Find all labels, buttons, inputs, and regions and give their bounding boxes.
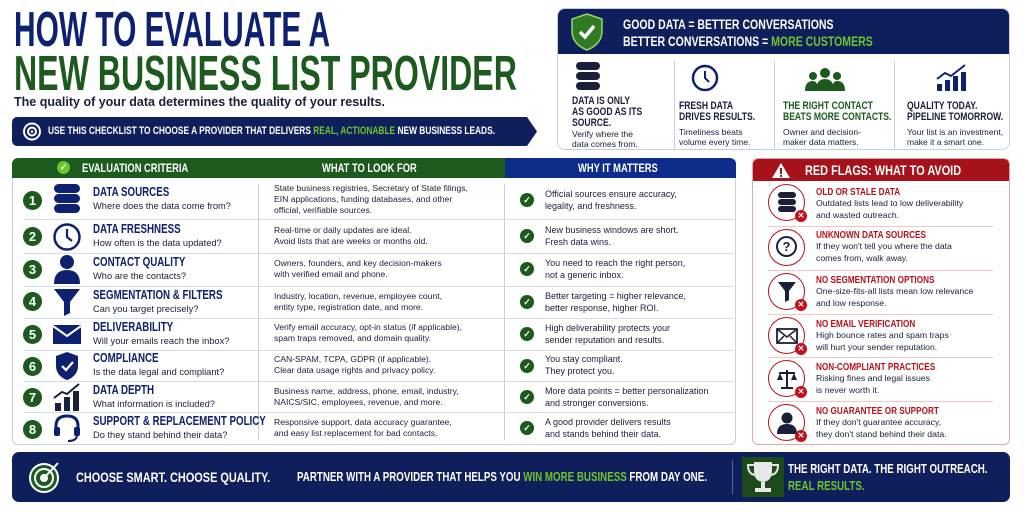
row 2: freshness: Real-time or daily updates are ideal. bbox=[274, 225, 412, 235]
title bbox=[14, 3, 517, 101]
row 8: support: Do they stand behind their data? bbox=[93, 430, 227, 440]
column: quality: make it a smart one. bbox=[907, 137, 984, 147]
row 1: data sources bbox=[23, 183, 677, 215]
flag 5: ✕ bbox=[798, 387, 804, 396]
row 1: data sources: State business registries, Secretary of State filings, bbox=[274, 183, 468, 193]
column: fresh: Timeliness beats bbox=[679, 127, 742, 137]
row 1: data sources: EIN applications, funding databases, and other bbox=[274, 194, 452, 204]
footer banner bbox=[12, 452, 1010, 502]
column: contact: Owner and decision- bbox=[783, 127, 861, 137]
column: quality: QUALITY TODAY. bbox=[907, 100, 977, 112]
row 1: data sources: Official sources ensure accuracy, bbox=[545, 189, 677, 199]
row 3: contact quality: ✓ bbox=[523, 264, 531, 274]
row 4: segmentation: Better targeting = higher relevance, bbox=[545, 291, 686, 301]
flag 6: NO GUARANTEE OR SUPPORT bbox=[816, 405, 939, 417]
row 8: support: 8 bbox=[29, 422, 36, 437]
table header bbox=[12, 158, 736, 178]
row 4: segmentation: Can you target precisely? bbox=[93, 304, 198, 314]
row 7: data depth: ✓ bbox=[523, 392, 531, 402]
row 4: segmentation: Industry, location, revenue, employee count, bbox=[274, 291, 442, 301]
flag 4 bbox=[768, 317, 949, 355]
row 7: data depth: More data points = better personalization bbox=[545, 386, 708, 396]
flag 3 bbox=[768, 273, 973, 311]
red header: RED FLAGS: WHAT TO AVOID bbox=[805, 162, 961, 178]
flag 5: NON-COMPLIANT PRACTICES bbox=[816, 361, 935, 373]
row 6: compliance: ✓ bbox=[523, 361, 531, 371]
row 8: support bbox=[23, 414, 671, 442]
row 5: deliverability: Will your emails reach the inbox? bbox=[93, 336, 229, 346]
flag 1 bbox=[768, 184, 964, 222]
column: contact: THE RIGHT CONTACT bbox=[783, 100, 873, 112]
row 8: support: and stands behind their data. bbox=[545, 429, 661, 439]
row 2: freshness: Fresh data wins. bbox=[545, 237, 611, 247]
table header: ✓ bbox=[60, 162, 67, 172]
row 4: segmentation: SEGMENTATION & FILTERS bbox=[93, 288, 222, 302]
column: fresh: DRIVES RESULTS. bbox=[679, 111, 755, 123]
flag 3: One-size-fits-all lists mean low relevance bbox=[816, 286, 973, 296]
flag 3: ✕ bbox=[798, 300, 804, 309]
row 8: support: SUPPORT & REPLACEMENT POLICY bbox=[93, 414, 266, 428]
row 7: data depth: NAICS/SIC, employees, revenue, and more. bbox=[274, 397, 443, 407]
flag 6: If they don't guarantee accuracy, bbox=[816, 417, 941, 427]
row 1: data sources: Where does the data come from? bbox=[93, 201, 231, 211]
flag 4: High bounce rates and spam traps bbox=[816, 330, 949, 340]
flag 2: comes from, walk away. bbox=[816, 252, 908, 262]
row 3: contact quality: CONTACT QUALITY bbox=[93, 255, 185, 269]
column: source: AS GOOD AS ITS bbox=[572, 106, 642, 118]
row 3: contact quality: Owners, founders, and key decision-makers bbox=[274, 258, 442, 268]
row 6: compliance: 6 bbox=[29, 359, 36, 374]
row 8: support: ✓ bbox=[523, 423, 531, 433]
flag 1: OLD OR STALE DATA bbox=[816, 186, 900, 198]
column: quality: Your list is an investment, bbox=[907, 127, 1003, 137]
row 1: data sources: official, verifiable sources. bbox=[274, 205, 372, 215]
flag 4: will hurt your sender reputation. bbox=[816, 342, 937, 352]
row 2: freshness: 2 bbox=[29, 229, 36, 244]
flag 4: NO EMAIL VERIFICATION bbox=[816, 318, 915, 330]
row 2: freshness: How often is the data updated? bbox=[93, 238, 222, 248]
row 1: data sources: 1 bbox=[29, 193, 36, 208]
column: quality: PIPELINE TOMORROW. bbox=[907, 111, 1003, 123]
icon: target bbox=[29, 462, 59, 493]
column: source bbox=[572, 62, 642, 148]
title: HOW TO EVALUATE A bbox=[14, 3, 330, 57]
row 5: deliverability: 5 bbox=[29, 327, 36, 342]
row 3: contact quality: with verified email and phone. bbox=[274, 269, 388, 279]
column: fresh bbox=[674, 61, 769, 151]
row 1: data sources: DATA SOURCES bbox=[93, 185, 169, 199]
table header: WHAT TO LOOK FOR bbox=[322, 161, 417, 175]
row 2: freshness: ✓ bbox=[523, 231, 531, 241]
column: source: data comes from. bbox=[572, 138, 638, 148]
row 5: deliverability: spam traps removed, and domain quality. bbox=[274, 333, 431, 343]
row 7: data depth: What information is included? bbox=[93, 399, 215, 409]
flag 2: If they won't tell you where the data bbox=[816, 241, 952, 251]
row 1: data sources: legality, and freshness. bbox=[545, 201, 636, 211]
flag 3: and low response. bbox=[816, 298, 887, 308]
row 3: contact quality bbox=[23, 255, 685, 284]
row 2: freshness: DATA FRESHNESS bbox=[93, 222, 181, 236]
row 4: segmentation: better response, higher ROI. bbox=[545, 303, 659, 313]
flag 2: UNKNOWN DATA SOURCES bbox=[816, 229, 926, 241]
flag 3: NO SEGMENTATION OPTIONS bbox=[816, 274, 934, 286]
row 6: compliance: CAN-SPAM, TCPA, GDPR (if applicable). bbox=[274, 354, 431, 364]
flag 2: ? bbox=[783, 239, 790, 254]
column: source: DATA IS ONLY bbox=[572, 95, 630, 107]
footer banner: CHOOSE SMART. CHOOSE QUALITY. bbox=[76, 469, 270, 485]
footer banner: REAL RESULTS. bbox=[788, 479, 865, 493]
flag 6 bbox=[768, 404, 947, 442]
row 5: deliverability: ✓ bbox=[523, 329, 531, 339]
flag 5: Risking fines and legal issues bbox=[816, 373, 930, 383]
row 6: compliance: COMPLIANCE bbox=[93, 351, 159, 365]
row 2: freshness: New business windows are short. bbox=[545, 225, 679, 235]
row 4: segmentation bbox=[23, 288, 686, 316]
flag 1: and wasted outreach. bbox=[816, 210, 899, 220]
banner: checklist bbox=[12, 117, 537, 146]
row 5: deliverability: DELIVERABILITY bbox=[93, 320, 173, 334]
row 7: data depth: 7 bbox=[29, 390, 36, 405]
icon: shield bbox=[571, 13, 603, 51]
flag 5: is never worth it. bbox=[816, 384, 879, 394]
column: contact: BEATS MORE CONTACTS. bbox=[783, 111, 891, 123]
footer banner: PARTNER WITH A PROVIDER THAT HELPS YOU WIN MORE BUSINESS FROM DAY ONE. bbox=[297, 470, 707, 484]
column: source: SOURCE. bbox=[572, 117, 611, 129]
row 3: contact quality: not a generic inbox. bbox=[545, 270, 624, 280]
red header bbox=[753, 159, 1011, 181]
row 6: compliance: They protect you. bbox=[545, 366, 615, 376]
row 7: data depth: Business name, address, phone, email, industry, bbox=[274, 386, 459, 396]
row 3: contact quality: Who are the contacts? bbox=[93, 271, 186, 281]
row 4: segmentation: 4 bbox=[29, 294, 36, 309]
column: source: Verify where the bbox=[572, 129, 633, 139]
row 2: freshness bbox=[23, 222, 679, 251]
footer banner: THE RIGHT DATA. THE RIGHT OUTREACH. bbox=[788, 462, 988, 476]
row 8: support: Responsive support, data accuracy guarantee, bbox=[274, 417, 452, 427]
row 6: compliance: Clear data usage rights and privacy policy. bbox=[274, 365, 435, 375]
panel: good data bbox=[557, 8, 1010, 150]
flag 6: ✕ bbox=[798, 431, 804, 440]
row 8: support: and easy list replacement for bad contacts. bbox=[274, 428, 437, 438]
column: fresh: FRESH DATA bbox=[679, 100, 733, 112]
column: contact bbox=[774, 61, 889, 151]
row 5: deliverability: High deliverability protects your bbox=[545, 323, 670, 333]
row 1: data sources: ✓ bbox=[523, 195, 531, 205]
row 7: data depth bbox=[23, 383, 708, 411]
row 8: support: A good provider delivers results bbox=[545, 417, 671, 427]
row 3: contact quality: You need to reach the right person, bbox=[545, 258, 685, 268]
flag 6: they don't stand behind their data. bbox=[816, 428, 947, 438]
flag 4: ✕ bbox=[798, 344, 804, 353]
row 5: deliverability: sender reputation and results. bbox=[545, 335, 664, 345]
row 6: compliance bbox=[23, 351, 623, 380]
column: contact: maker data matters. bbox=[783, 137, 859, 147]
row 6: compliance: Is the data legal and compliant? bbox=[93, 367, 224, 377]
row 7: data depth: and stronger conversions. bbox=[545, 398, 649, 408]
flag 1: Outdated lists lead to low deliverability bbox=[816, 198, 963, 208]
header band bbox=[558, 9, 1011, 54]
panel: red flags bbox=[752, 158, 1010, 445]
row 4: segmentation: ✓ bbox=[523, 297, 531, 307]
title: NEW BUSINESS LIST PROVIDER bbox=[14, 47, 517, 101]
flag 2 bbox=[768, 229, 952, 266]
table header: WHY IT MATTERS bbox=[578, 161, 658, 175]
header band: BETTER CONVERSATIONS = MORE CUSTOMERS bbox=[623, 34, 873, 49]
row 7: data depth: DATA DEPTH bbox=[93, 383, 154, 397]
column: fresh: volume every time. bbox=[679, 137, 750, 147]
flag 1: ✕ bbox=[798, 211, 804, 220]
row 6: compliance: You stay compliant. bbox=[545, 354, 623, 364]
flag 5 bbox=[768, 360, 935, 398]
row 5: deliverability: Verify email accuracy, opt-in status (if applicable), bbox=[274, 322, 462, 332]
row 5: deliverability bbox=[23, 320, 670, 346]
panel: evaluation table bbox=[12, 158, 736, 445]
header band: GOOD DATA = BETTER CONVERSATIONS bbox=[623, 17, 834, 32]
icon: trophy bbox=[742, 457, 784, 497]
table header: EVALUATION CRITERIA bbox=[82, 161, 188, 175]
row 2: freshness: Avoid lists that are weeks or months old. bbox=[274, 236, 428, 246]
row 4: segmentation: entity type, registration date, and more. bbox=[274, 302, 423, 312]
banner: checklist: USE THIS CHECKLIST TO CHOOSE A PROVIDER THAT DELIVERS REAL, ACTIONABLE NEW BUSINESS LEADS. bbox=[48, 125, 495, 137]
column: quality bbox=[894, 61, 1009, 151]
row 3: contact quality: 3 bbox=[29, 262, 36, 277]
subtitle: The quality of your data determines the quality of your results. bbox=[14, 95, 385, 109]
